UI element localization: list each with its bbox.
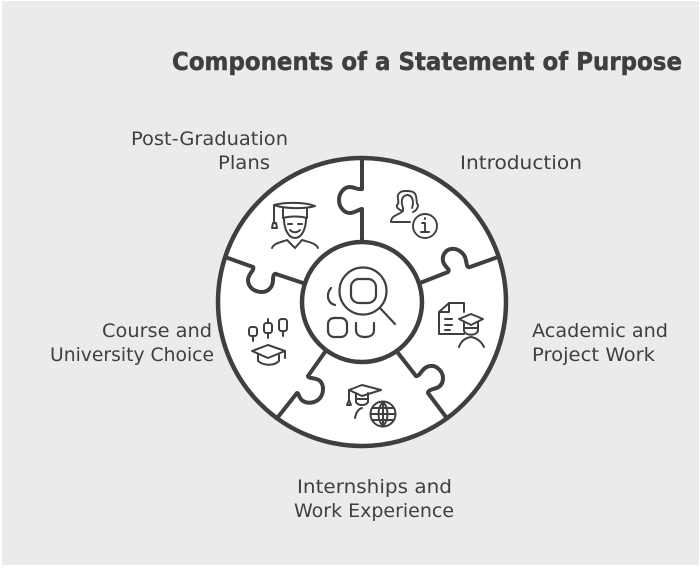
puzzle wheel [218,158,506,446]
label: Post-Graduation Plans [131,128,288,174]
label: Course and University Choice: Course and [102,320,212,342]
icon: central magnifier with shapes [328,268,395,337]
label: Academic and Project Work [532,320,668,366]
label: Internships and Work Experience [294,476,454,522]
divider: upper right puzzle seam [420,249,498,283]
label: Course and University Choice [50,320,214,366]
icon: candlesticks with cap [249,319,287,365]
label: Post-Graduation Plans: Post-Graduation [131,128,288,150]
label: Academic and Project Work: Academic and [532,320,668,342]
divider: lower left puzzle seam [278,352,325,417]
icon: document with graduate [439,303,484,347]
divider: lower right puzzle seam [398,353,446,417]
divider: upper left puzzle seam [225,257,303,292]
label: Internships and Work Experience: Work Experience [294,500,454,522]
label: Introduction: Introduction [460,152,582,174]
label: Internships and Work Experience: Internships and [297,476,452,498]
label: Academic and Project Work: Project Work [532,344,655,366]
label: Course and University Choice: University Choice [50,344,214,366]
label: Post-Graduation Plans: Plans [218,152,270,174]
divider: top puzzle seam [339,158,362,242]
icon: person with info badge [391,191,437,238]
icon: graduate with cap [272,203,318,248]
icon: graduate with globe [347,385,396,426]
